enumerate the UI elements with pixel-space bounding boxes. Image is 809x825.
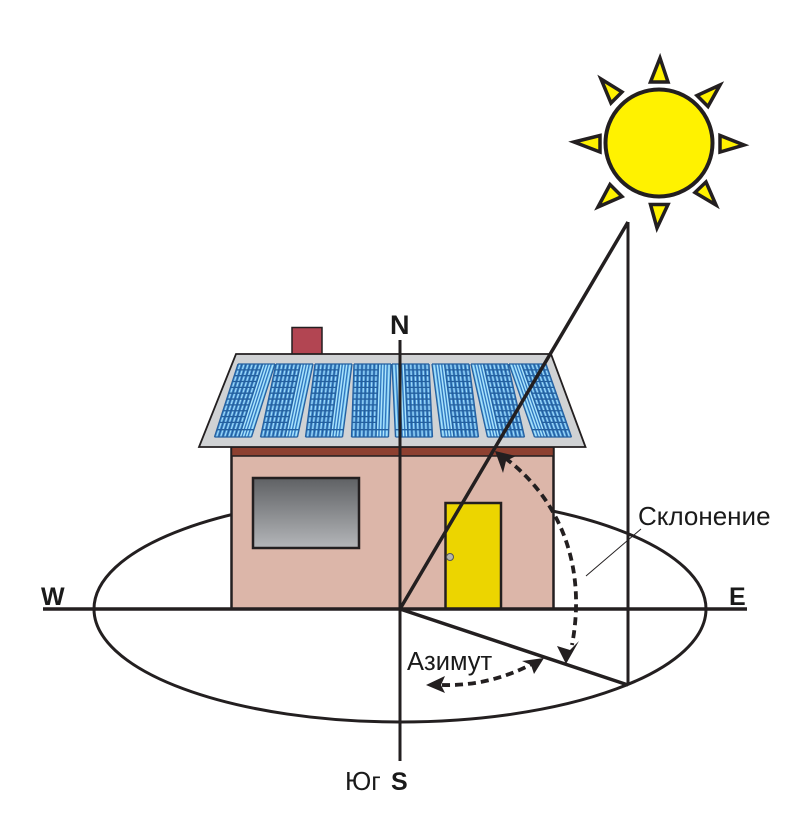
fascia board bbox=[232, 447, 554, 456]
sun disc bbox=[606, 90, 712, 196]
label: S: S bbox=[391, 768, 408, 796]
declination leader line bbox=[586, 529, 641, 576]
vertical projection line bbox=[626, 222, 630, 685]
azimuth dashed arc bbox=[426, 658, 544, 693]
door knob bbox=[446, 554, 454, 560]
sun rays bbox=[574, 58, 744, 228]
horizon ellipse bbox=[94, 496, 706, 722]
label: E: E bbox=[729, 583, 746, 611]
north-south axis bbox=[398, 340, 402, 761]
label: W: W bbox=[41, 583, 65, 611]
window bbox=[253, 478, 359, 548]
chimney bbox=[292, 328, 322, 354]
azimuth ground line bbox=[400, 609, 628, 685]
declination dashed arc bbox=[495, 451, 579, 664]
house bbox=[199, 328, 586, 609]
solar panels bbox=[214, 364, 572, 437]
label: N: N bbox=[390, 310, 410, 340]
sun bbox=[574, 58, 744, 228]
sun ray line bbox=[400, 222, 628, 609]
east-west axis bbox=[43, 607, 747, 611]
label: azimuth: Азимут bbox=[407, 648, 493, 676]
label: south: Юг bbox=[345, 766, 381, 796]
wall bbox=[232, 448, 554, 609]
door bbox=[446, 503, 501, 609]
roof bbox=[199, 354, 586, 447]
label: declination: Склонение bbox=[638, 501, 771, 531]
